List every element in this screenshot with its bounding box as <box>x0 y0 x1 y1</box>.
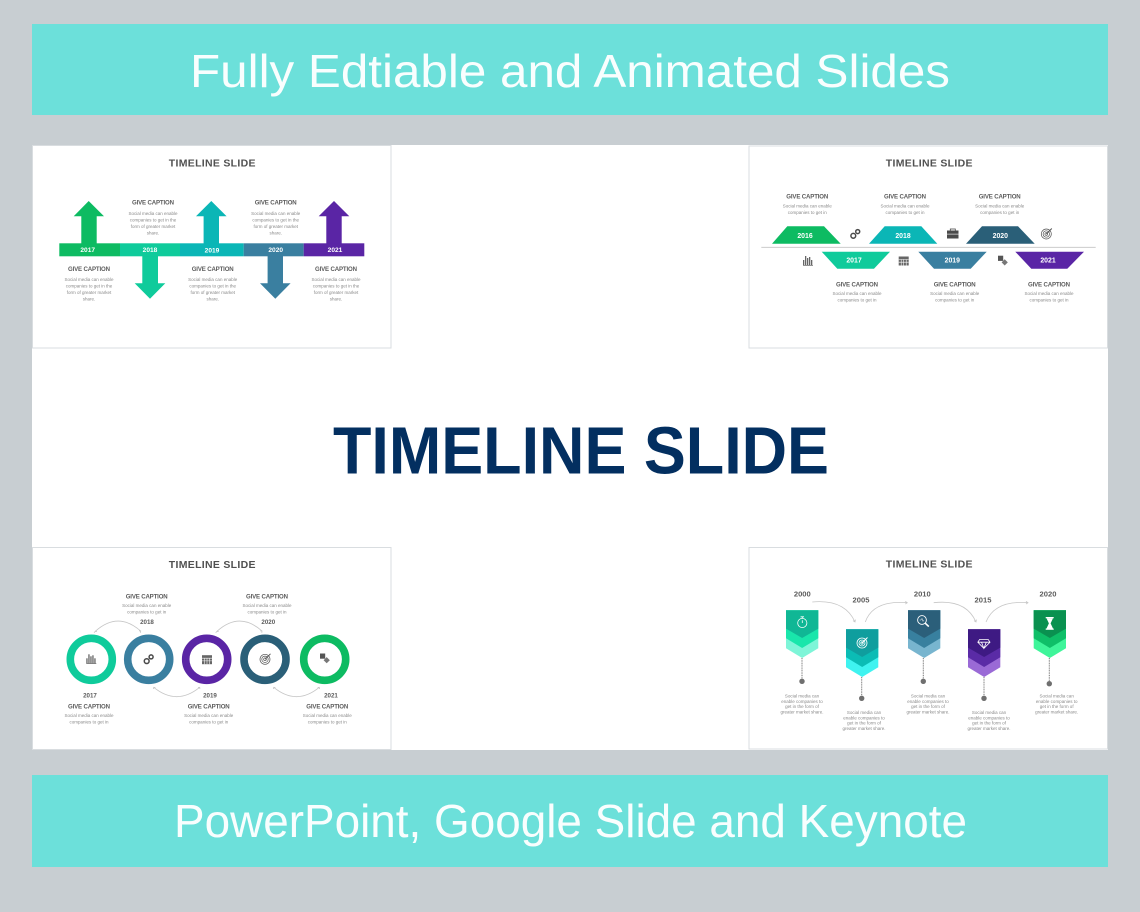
central white slide <box>32 145 1108 750</box>
text under banner 2005: Social media can <box>847 710 882 715</box>
captions below bar: Social media can enable <box>64 277 114 282</box>
captions below rings: Social media can enable <box>303 713 352 718</box>
captions below rings: 2019 <box>203 693 217 700</box>
captions above rings: companies to get in <box>127 610 167 615</box>
panel: arrows timeline <box>32 146 391 348</box>
icon: squares <box>320 654 330 663</box>
captions below bar: Social media can enable <box>311 277 361 282</box>
captions below rings: companies to get in <box>69 720 109 725</box>
captions below line: companies to get in <box>935 298 975 303</box>
year bar: 2020 <box>268 247 283 254</box>
captions below bar: share. <box>330 297 342 302</box>
captions below bar <box>64 266 361 302</box>
captions below line: GIVE CAPTION <box>836 281 878 288</box>
captions above rings: 2018 <box>140 619 154 626</box>
captions above bar: Social media can enable <box>128 211 178 216</box>
panel title: TIMELINE SLIDE <box>886 159 973 170</box>
captions above line: GIVE CAPTION <box>786 194 828 201</box>
text under banner 2005 <box>842 710 886 731</box>
icon: squares <box>998 256 1008 266</box>
text under banner 2015: greater market share. <box>967 726 1011 731</box>
text under banner 2020: enable companies to <box>1036 699 1078 704</box>
curved arrows <box>812 601 1028 622</box>
captions below line: GIVE CAPTION <box>934 281 976 288</box>
panel title: TIMELINE SLIDE <box>169 158 256 169</box>
year labels: 2020 <box>1040 589 1056 598</box>
captions below line: companies to get in <box>1029 298 1069 303</box>
year bar: 2017 <box>80 247 95 254</box>
lower trapezoids: 2021 <box>1040 258 1056 265</box>
captions below bar: Social media can enable <box>188 277 238 282</box>
year bar: 2019 <box>205 248 220 255</box>
text under banner 2000: Social media can <box>785 694 820 699</box>
icon: calendar <box>899 256 909 266</box>
text under banner 2015: get in the form of <box>972 721 1007 726</box>
text under banner 2020: Social media can <box>1040 694 1074 699</box>
text under banner 2015 <box>967 710 1011 731</box>
stems and dots <box>799 658 1052 701</box>
text under banner 2015: Social media can <box>972 710 1007 715</box>
icon: target <box>1041 228 1052 239</box>
lower trapezoids <box>822 252 1084 269</box>
captions below bar: share. <box>206 297 219 302</box>
captions below rings: 2021 <box>324 693 338 700</box>
captions below bar: GIVE CAPTION <box>68 266 110 273</box>
captions below line: companies to get in <box>837 298 877 303</box>
text under banner 2015: enable companies to <box>968 715 1010 720</box>
captions below rings: 2017 <box>83 693 97 700</box>
upper trapezoids: 2018 <box>895 233 911 240</box>
panel: ring timeline <box>32 548 391 750</box>
captions below line <box>832 281 1074 303</box>
captions above bar: companies to get in the <box>130 217 177 222</box>
curved arrows <box>94 621 320 697</box>
lower trapezoids: 2019 <box>945 258 960 265</box>
captions below line: Social media can enable <box>1024 291 1074 296</box>
captions above bar: form of greater market <box>131 224 176 229</box>
year bar <box>59 243 364 256</box>
captions above bar: share. <box>269 230 282 235</box>
captions below rings: companies to get in <box>308 720 347 725</box>
text under banner 2010 <box>906 694 950 714</box>
banner 2020 <box>1034 610 1066 658</box>
upper trapezoids <box>772 226 1035 244</box>
icon: target <box>260 654 270 664</box>
upper trapezoids: 2020 <box>993 233 1008 240</box>
text under banner 2010: enable companies to <box>907 699 949 704</box>
captions above bar: GIVE CAPTION <box>132 200 174 207</box>
icon: briefcase <box>947 229 958 238</box>
text under banner 2000: enable companies to <box>781 699 823 704</box>
banner 2000 <box>786 610 818 658</box>
banner 2015 <box>968 629 1000 677</box>
text under banner 2020: get in the form of <box>1040 704 1074 709</box>
captions below bar: share. <box>83 297 95 302</box>
center title: TIMELINE SLIDE <box>333 414 829 488</box>
text under banner 2010: get in the form of <box>911 704 946 709</box>
captions above bar: form of greater market <box>253 224 299 229</box>
icon: hourglass <box>1046 617 1054 630</box>
captions below rings <box>64 693 352 725</box>
captions below line: Social media can enable <box>832 291 882 296</box>
captions above line: Social media can enable <box>975 203 1025 208</box>
captions above bar <box>128 200 301 235</box>
panel title: TIMELINE SLIDE <box>169 560 256 571</box>
text under banner 2005: get in the form of <box>847 721 882 726</box>
captions above line: Social media can enable <box>880 203 930 208</box>
axis line <box>761 246 1096 248</box>
banner 2010 <box>908 610 940 658</box>
text under banner 2010: greater market share. <box>906 710 950 714</box>
up and down arrows <box>74 201 349 299</box>
captions above bar: Social media can enable <box>251 211 301 216</box>
captions above rings: 2020 <box>261 619 276 626</box>
captions above line: companies to get in <box>980 210 1020 215</box>
text under banner 2010: Social media can <box>911 694 946 699</box>
captions above rings <box>122 593 292 626</box>
text under banner 2020 <box>1035 694 1078 714</box>
text under banner 2005: enable companies to <box>843 715 885 720</box>
captions below bar: companies to get in the <box>313 284 360 289</box>
icon: magnifier <box>918 616 929 627</box>
captions below rings: GIVE CAPTION <box>188 704 230 711</box>
captions below bar: form of greater market <box>190 290 236 295</box>
text under banner 2000: greater market share. <box>780 710 824 714</box>
icon: gears <box>144 655 153 664</box>
captions above line: companies to get in <box>885 210 925 215</box>
captions below bar: companies to get in the <box>189 284 236 289</box>
captions below bar: GIVE CAPTION <box>192 266 234 273</box>
year bar: 2018 <box>143 247 158 254</box>
year labels: 2010 <box>914 589 931 598</box>
text under banner 2000 <box>780 694 824 714</box>
text under banner 2020: greater market share. <box>1035 710 1078 714</box>
text under banner 2000: get in the form of <box>785 704 820 709</box>
icon: target white <box>857 638 868 648</box>
captions below rings: GIVE CAPTION <box>68 704 110 711</box>
captions above line: GIVE CAPTION <box>884 194 926 201</box>
icon: bar chart <box>86 654 96 664</box>
captions below bar: companies to get in the <box>66 284 113 289</box>
captions above rings: GIVE CAPTION <box>126 593 168 600</box>
captions above line: Social media can enable <box>783 203 832 208</box>
captions above line <box>783 194 1025 215</box>
captions below bar: form of greater market <box>314 290 359 295</box>
icon: calendar <box>202 655 212 664</box>
captions below rings: Social media can enable <box>64 713 114 718</box>
icon: bar chart <box>803 256 813 266</box>
captions above bar: companies to get in the <box>252 217 299 222</box>
captions above rings: Social media can enable <box>242 603 292 608</box>
panel: trapezoid timeline <box>749 146 1108 348</box>
captions above bar: share. <box>147 230 159 235</box>
year labels: 2015 <box>975 595 992 604</box>
captions above line: companies to get in <box>788 210 827 215</box>
rings <box>70 638 346 680</box>
lower trapezoids: 2017 <box>846 258 862 265</box>
captions above rings: Social media can enable <box>122 603 172 608</box>
text under banner 2005: greater market share. <box>842 726 886 731</box>
upper trapezoids: 2016 <box>797 233 813 240</box>
year labels <box>794 589 1056 604</box>
panel: banner timeline <box>749 548 1108 749</box>
captions below line: GIVE CAPTION <box>1028 281 1070 288</box>
banner 2005 <box>846 629 878 677</box>
year labels: 2000 <box>794 589 811 598</box>
banner: bottom heading: PowerPoint, Google Slide and Keynote <box>174 795 967 847</box>
icon: gears <box>851 230 860 238</box>
icon: stopwatch <box>798 617 807 628</box>
year bar: 2021 <box>328 247 343 254</box>
banner: top heading: Fully Edtiable and Animated Slides <box>190 45 950 97</box>
banner: top heading <box>32 24 1108 115</box>
captions below rings: companies to get in <box>189 720 229 725</box>
captions below rings: Social media can enable <box>184 713 234 718</box>
captions below bar: form of greater market <box>67 290 112 295</box>
icon: diamond <box>978 640 990 648</box>
captions below line: Social media can enable <box>930 291 980 296</box>
captions above rings: companies to get in <box>247 610 287 615</box>
captions above line: GIVE CAPTION <box>979 194 1021 201</box>
captions above bar: GIVE CAPTION <box>255 200 297 207</box>
year labels: 2005 <box>853 595 870 604</box>
captions below rings: GIVE CAPTION <box>306 704 348 711</box>
captions above rings: GIVE CAPTION <box>246 593 288 600</box>
panel title: TIMELINE SLIDE <box>886 560 973 571</box>
banner: bottom heading <box>32 775 1108 867</box>
captions below bar: GIVE CAPTION <box>315 266 357 273</box>
